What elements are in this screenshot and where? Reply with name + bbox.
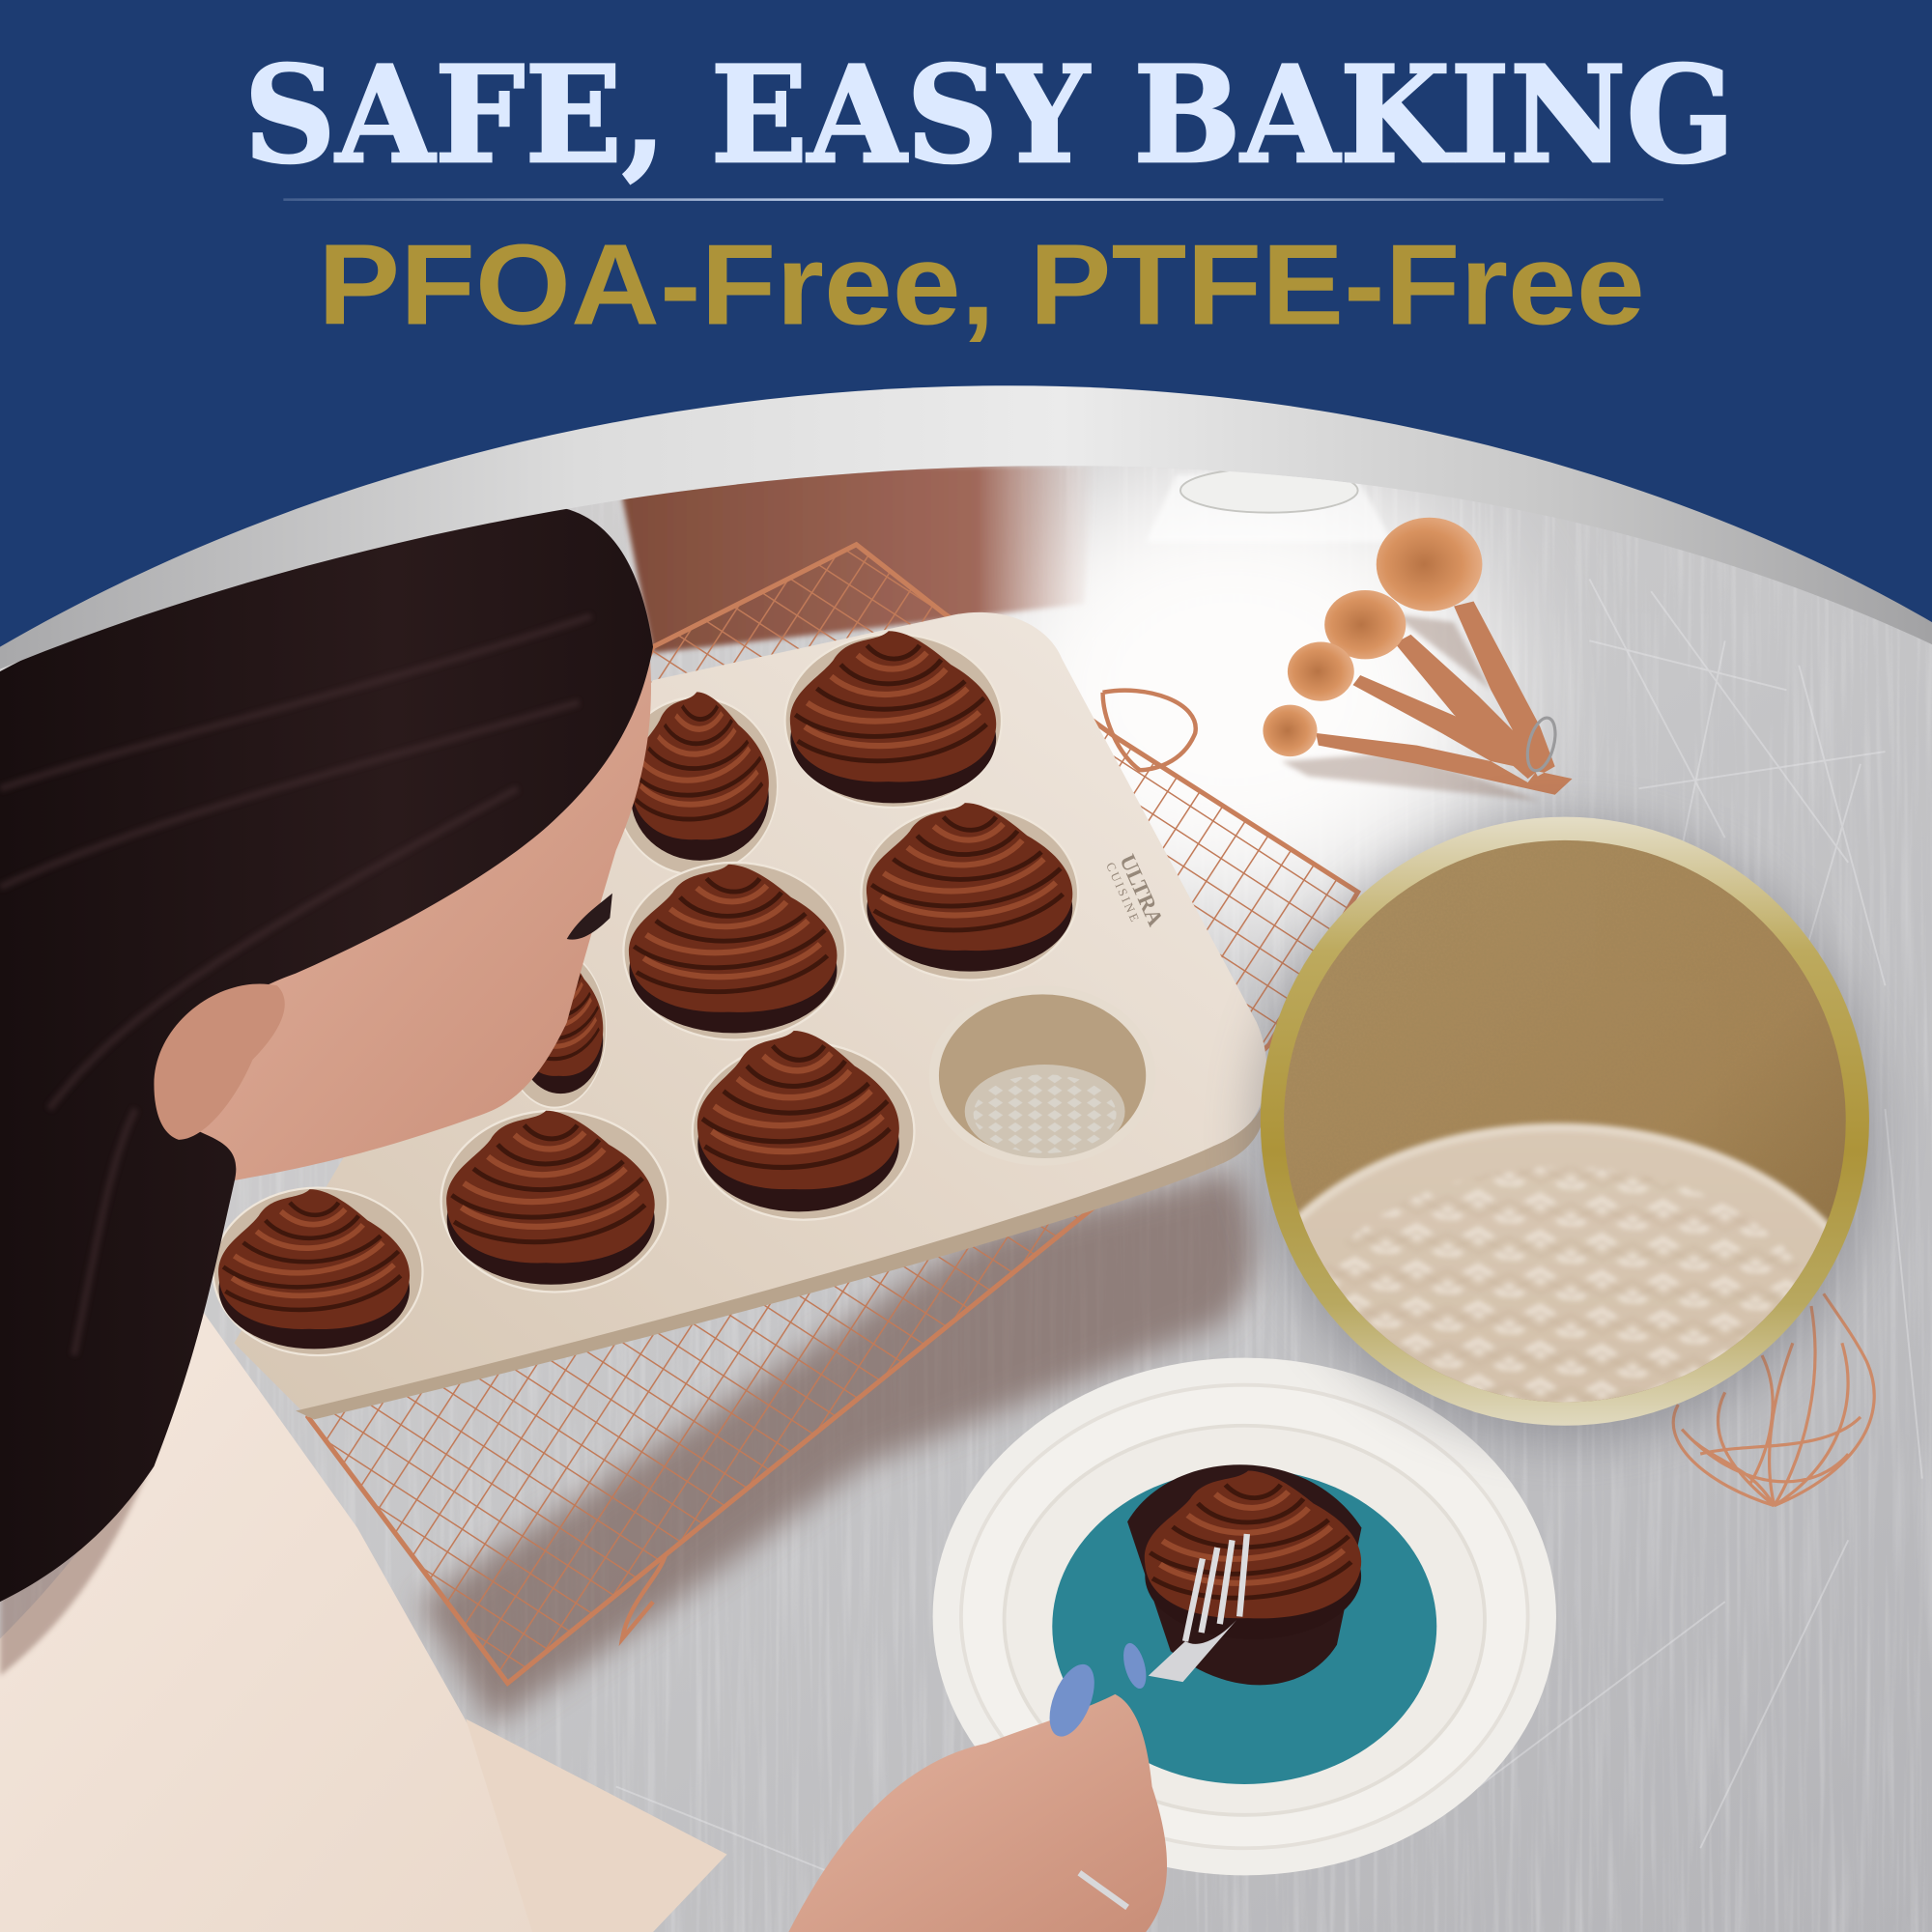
steel table [0,456,1932,1932]
spoon bowl smallest [1263,705,1318,756]
plate [933,1358,1556,1875]
spoon shadows [1282,613,1540,801]
copper reflection [616,466,1096,653]
cupcake [631,692,769,861]
zoom lens: non-stick surface close-up [1236,817,1882,1576]
brand logo: ULTRA [1115,851,1168,930]
table scratches [616,579,1922,1886]
photo panel: baking scene [0,456,1932,1932]
pan floor [1236,1127,1882,1576]
muffin tray [213,612,1266,1419]
wells [784,634,1002,808]
cupcake [629,865,838,1033]
empty well [929,985,1155,1166]
surface grain [1282,838,1848,1405]
hair strands [0,616,591,1355]
spoon handles [1316,601,1573,795]
lens gold ring [1261,817,1869,1426]
spoon bowl medium [1324,590,1406,659]
fingernail [1120,1640,1151,1691]
cupcake [218,1189,410,1349]
cooling rack [308,545,1358,1683]
tray shadow [419,1171,1255,1725]
plated cupcake [1145,1470,1361,1639]
tray edge [296,1091,1265,1419]
brand logo: CUISINE [1103,861,1143,926]
plate teal centre [1052,1468,1436,1784]
hand [788,1694,1167,1932]
curved grey band [0,385,1932,690]
cupcake [790,631,996,803]
title: SAFE, EASY BAKING [244,38,1735,193]
cupcake [518,952,603,1094]
sleeve [466,1719,727,1932]
spoon bowl large [1377,518,1482,611]
woman [0,505,1167,1932]
hair [0,505,653,1602]
divider [283,198,1663,201]
cupcake [697,1031,899,1211]
cupcake liner [1127,1464,1361,1685]
rack handle [622,691,1196,1638]
fork [974,1534,1247,1848]
spoon ring [1522,715,1560,774]
measuring spoons [1263,518,1573,795]
top [0,1312,536,1932]
subtitle: PFOA-Free, PTFE-Free [318,221,1645,349]
brushed steel texture [469,618,1932,1932]
ring [1079,1873,1127,1907]
ear [154,983,285,1140]
spoon bowl small [1288,642,1354,701]
thumbnail [1040,1658,1103,1743]
cupcake [867,803,1072,972]
face and neck [148,629,651,1180]
hair tips [0,1441,160,1676]
whisk [1673,1293,1874,1506]
zoom lens shadow [1254,820,1875,1441]
glass jar [1159,471,1387,541]
embossed pattern [1297,1167,1828,1524]
table highlight [961,456,1503,924]
cupcake [446,1111,655,1285]
lens interior [1236,838,1882,1576]
eye lashes [567,894,612,940]
